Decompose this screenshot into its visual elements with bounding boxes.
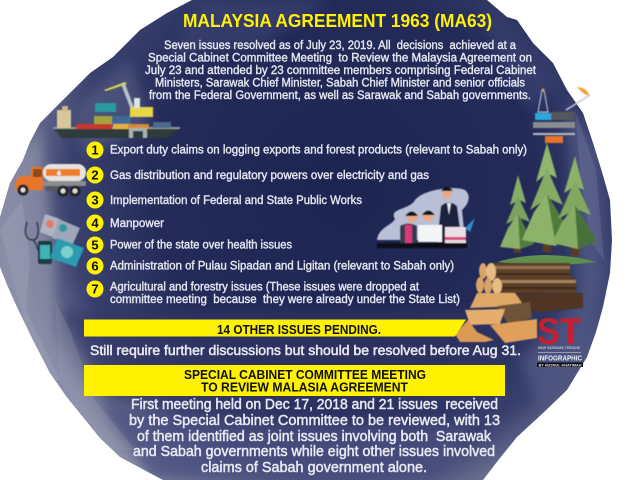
icon: health cards and stethoscope bbox=[25, 214, 84, 267]
intro text block bbox=[145, 40, 537, 102]
banner: special cabinet committee meeting: TO REVIEW MALASIA AGREEMENT bbox=[201, 380, 408, 394]
title: MALAYSIA AGREEMENT 1963 (MA63) bbox=[183, 11, 492, 31]
numbered list of resolved issues bbox=[86, 142, 527, 306]
numbered list of resolved issues: Manpower bbox=[110, 218, 164, 230]
intro text block: Special Cabinet Committee Meeting to Review the Malaysia Agreement on bbox=[148, 52, 532, 64]
numbered list of resolved issues: 3 bbox=[91, 192, 99, 208]
numbered list of resolved issues: committee meeting because they were already under the State List) bbox=[110, 294, 460, 306]
numbered list of resolved issues: Power of the state over health issues bbox=[110, 240, 292, 252]
logo: ST New Sarawak Tribune infographic: INFOGRAPHIC bbox=[538, 356, 582, 362]
banner: 14 other issues pending: 14 OTHER ISSUES PENDING. bbox=[217, 323, 381, 337]
logo: ST New Sarawak Tribune infographic: NEW SARAWAK TRIBUNE bbox=[538, 346, 581, 350]
numbered list of resolved issues: Gas distribution and regulatory powers over electricity and gas bbox=[110, 170, 429, 182]
text block: first meeting details: of them identified as joint issues involving both Sarawak bbox=[137, 429, 492, 445]
text block: first meeting details bbox=[129, 397, 500, 476]
icon: pine trees bbox=[500, 143, 597, 256]
icon: ground mound bbox=[497, 255, 597, 265]
numbered list of resolved issues: Agricultural and forestry issues (These issues were dropped at bbox=[110, 282, 420, 294]
intro text block: Seven issues resolved as of July 23, 2019. All decisions achieved at a bbox=[164, 40, 517, 52]
numbered list of resolved issues: Administration of Pulau Sipadan and Ligitan (relevant to Sabah only) bbox=[110, 260, 454, 272]
numbered list of resolved issues: 6 bbox=[91, 258, 99, 274]
banner: special cabinet committee meeting: SPECIAL CABINET COMMITTEE MEETING bbox=[184, 368, 426, 382]
text block: first meeting details: claims of Sabah government alone. bbox=[201, 460, 427, 476]
icon: gas tanker truck bbox=[15, 164, 86, 196]
banner: 14 other issues pending bbox=[84, 320, 466, 337]
numbered list of resolved issues: 2 bbox=[91, 168, 99, 182]
logo: ST New Sarawak Tribune infographic: BY HUSNUL KHATIMAH bbox=[538, 363, 582, 367]
numbered list of resolved issues: 1 bbox=[91, 142, 99, 158]
numbered list of resolved issues: Export duty claims on logging exports and forest products (relevant to Sabah only) bbox=[110, 144, 527, 156]
icon: cargo ship with crane bbox=[53, 82, 180, 138]
numbered list of resolved issues: Implementation of Federal and State Public Works bbox=[110, 195, 362, 207]
numbered list of resolved issues: 5 bbox=[91, 238, 99, 252]
banner: special cabinet committee meeting bbox=[84, 365, 505, 396]
intro text block: Ministers, Sarawak Chief Minister, Sabah Chief Minister and senior officials bbox=[155, 78, 525, 90]
numbered list of resolved issues: 4 bbox=[91, 216, 99, 230]
text block: first meeting details: by the Special Cabinet Committee to be reviewed, with 13 bbox=[129, 413, 500, 429]
icon: stacked logs bbox=[455, 263, 583, 343]
text block: first meeting details: First meeting held on Dec 17, 2018 and 21 issues received bbox=[131, 397, 498, 413]
text block: first meeting details: and Sabah governments while eight other issues involved bbox=[133, 444, 495, 460]
icon: three office workers bbox=[377, 187, 475, 248]
intro text block: July 23 and attended by 23 committee members comprising Federal Cabinet bbox=[145, 65, 537, 77]
icon: oil rig bbox=[533, 87, 590, 143]
numbered list of resolved issues: 7 bbox=[91, 282, 99, 296]
intro text block: from the Federal Government, as well as Sarawak and Sabah governments. bbox=[149, 90, 531, 102]
text: further discussions: Still require further discussions but should be resolved before Aug 31. bbox=[90, 343, 521, 358]
logo: ST New Sarawak Tribune infographic: ST bbox=[537, 311, 581, 352]
